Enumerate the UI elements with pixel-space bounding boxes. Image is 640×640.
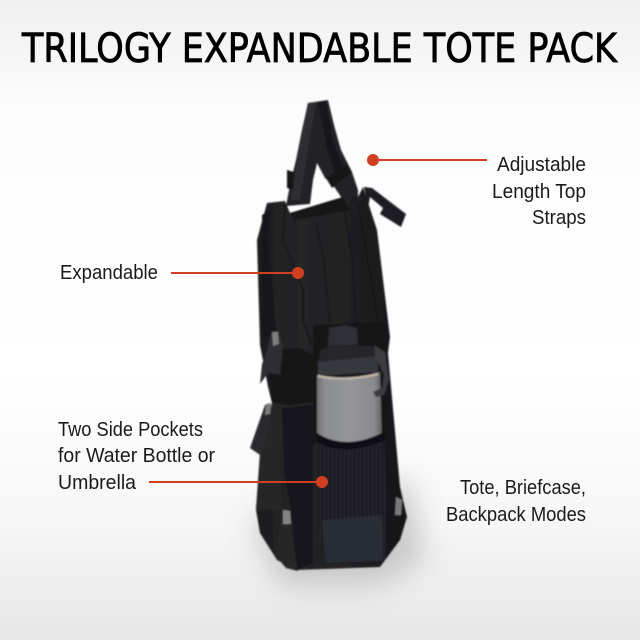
backpack product illustration — [250, 100, 407, 571]
left pocket rib — [262, 210, 276, 340]
label: adjustable length top straps: Adjustable — [497, 154, 586, 176]
label: carry modes: Tote, Briefcase, — [460, 477, 586, 499]
leader line: straps — [373, 159, 487, 161]
label: carry modes: Backpack Modes — [446, 504, 586, 526]
marker: straps — [367, 154, 379, 166]
front pocket panel — [268, 348, 313, 405]
label: adjustable length top straps: Length Top — [492, 181, 586, 203]
top opening rim — [290, 197, 350, 220]
mesh pocket lower highlight — [322, 515, 383, 563]
top straps — [286, 100, 358, 206]
label: two side pockets: Two Side Pockets — [58, 419, 203, 441]
marker: expandable — [292, 267, 304, 279]
leader line: side pockets — [149, 481, 322, 483]
side buckle strap — [364, 187, 406, 227]
center lower panel — [282, 405, 313, 570]
callout: adjustable straps — [367, 154, 586, 229]
expansion gusset seams — [283, 205, 378, 345]
label: two side pockets — [58, 419, 215, 494]
zipper pulls — [250, 331, 402, 571]
callout: side pockets — [58, 419, 328, 494]
mesh side pocket — [315, 432, 386, 564]
callout: expandable — [60, 262, 304, 284]
label: carry modes — [446, 477, 586, 526]
leader line: expandable — [171, 272, 298, 274]
label: two side pockets: for Water Bottle or — [58, 445, 215, 467]
bag body — [256, 187, 407, 570]
label: adjustable length top straps — [492, 154, 586, 229]
mesh pocket elastic band — [315, 432, 385, 450]
marker: side pockets — [316, 476, 328, 488]
recess behind bottle — [313, 322, 388, 445]
label: expandable: Expandable — [60, 262, 158, 284]
label: two side pockets: Umbrella — [58, 472, 137, 494]
label: adjustable length top straps: Straps — [532, 207, 586, 229]
water bottle — [317, 325, 389, 445]
bag floor shadow — [250, 480, 425, 585]
lower pocket panel — [256, 403, 290, 510]
